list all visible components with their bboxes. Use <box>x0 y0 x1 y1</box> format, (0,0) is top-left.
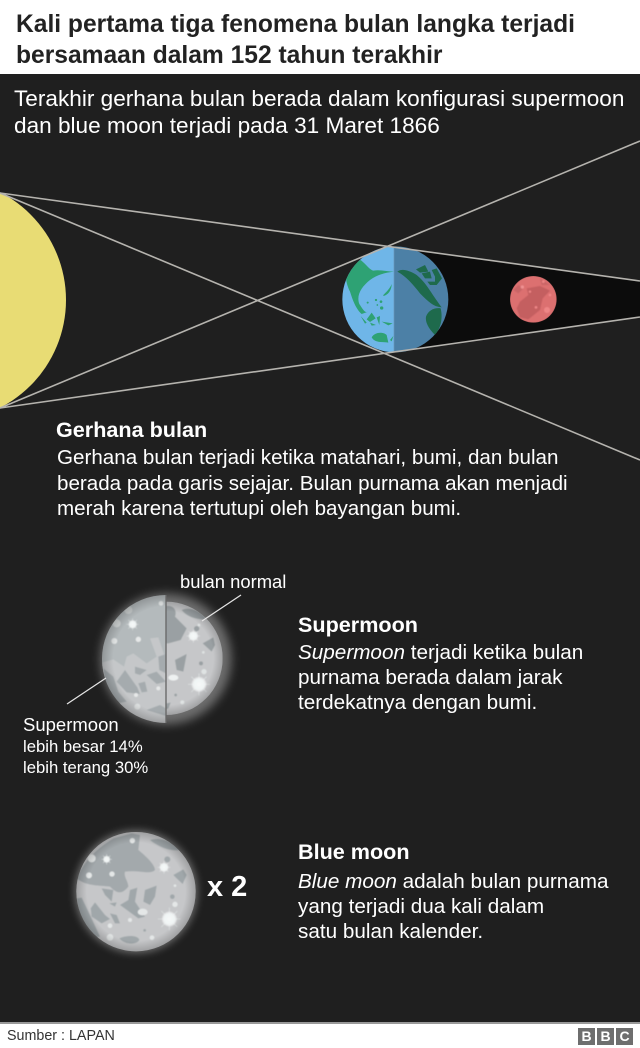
pointer: normal moon <box>202 595 241 621</box>
subtitle: dan blue moon terjadi pada 31 Maret 1866 <box>14 113 440 138</box>
BBC logo: B <box>581 1028 592 1044</box>
earth <box>340 245 451 353</box>
BBC logo <box>578 1028 633 1045</box>
title: Kali pertama tiga fenomena bulan langka terjadi <box>16 11 575 38</box>
blue moon <box>74 830 198 953</box>
shadow cone <box>394 247 640 352</box>
text: blue moon: satu bulan kalender. <box>298 920 483 943</box>
heading: blue moon: Blue moon <box>298 839 410 864</box>
text: gerhana bulan: merah karena tertutupi oleh bayangan bumi. <box>57 497 461 520</box>
normal moon half <box>166 602 222 715</box>
label: bulan normal: bulan normal <box>180 571 286 592</box>
text: blue moon <box>298 870 609 943</box>
text: gerhana bulan <box>57 446 568 520</box>
text: supermoon: purnama berada dalam jarak <box>298 666 562 689</box>
subtitle <box>14 86 624 138</box>
text: supermoon: Supermoon terjadi ketika bulan <box>298 641 583 664</box>
BBC logo: B <box>600 1028 611 1044</box>
label: supermoon stats: Supermoon <box>23 714 119 735</box>
supermoon half <box>102 595 166 723</box>
label: supermoon stats: lebih terang 30% <box>23 758 148 777</box>
text: supermoon <box>298 641 583 714</box>
source: Sumber : LAPAN <box>7 1028 115 1044</box>
sun <box>0 179 66 421</box>
label: supermoon stats: lebih besar 14% <box>23 737 143 756</box>
title: bersamaan dalam 152 tahun terakhir <box>16 42 442 68</box>
BBC logo: C <box>619 1028 630 1044</box>
subtitle: Terakhir gerhana bulan berada dalam konfigurasi supermoon <box>14 86 624 111</box>
heading: supermoon: Supermoon <box>298 612 418 637</box>
text: supermoon: terdekatnya dengan bumi. <box>298 691 537 714</box>
heading: gerhana bulan: Gerhana bulan <box>56 417 207 442</box>
label: supermoon stats <box>23 714 148 777</box>
pointer: supermoon <box>67 678 106 704</box>
text: blue moon: Blue moon adalah bulan purnama <box>298 870 609 893</box>
text: gerhana bulan: Gerhana bulan terjadi ketika matahari, bumi, dan bulan <box>57 446 558 469</box>
ray lines <box>0 141 640 460</box>
supermoon comparison moon <box>97 594 231 728</box>
eclipse diagram <box>0 140 640 958</box>
title <box>16 11 575 68</box>
label: x 2: x 2 <box>207 871 247 903</box>
red moon <box>510 276 557 323</box>
text: gerhana bulan: berada pada garis sejajar. Bulan purnama akan menjadi <box>57 472 568 494</box>
text: blue moon: yang terjadi dua kali dalam <box>298 895 544 918</box>
